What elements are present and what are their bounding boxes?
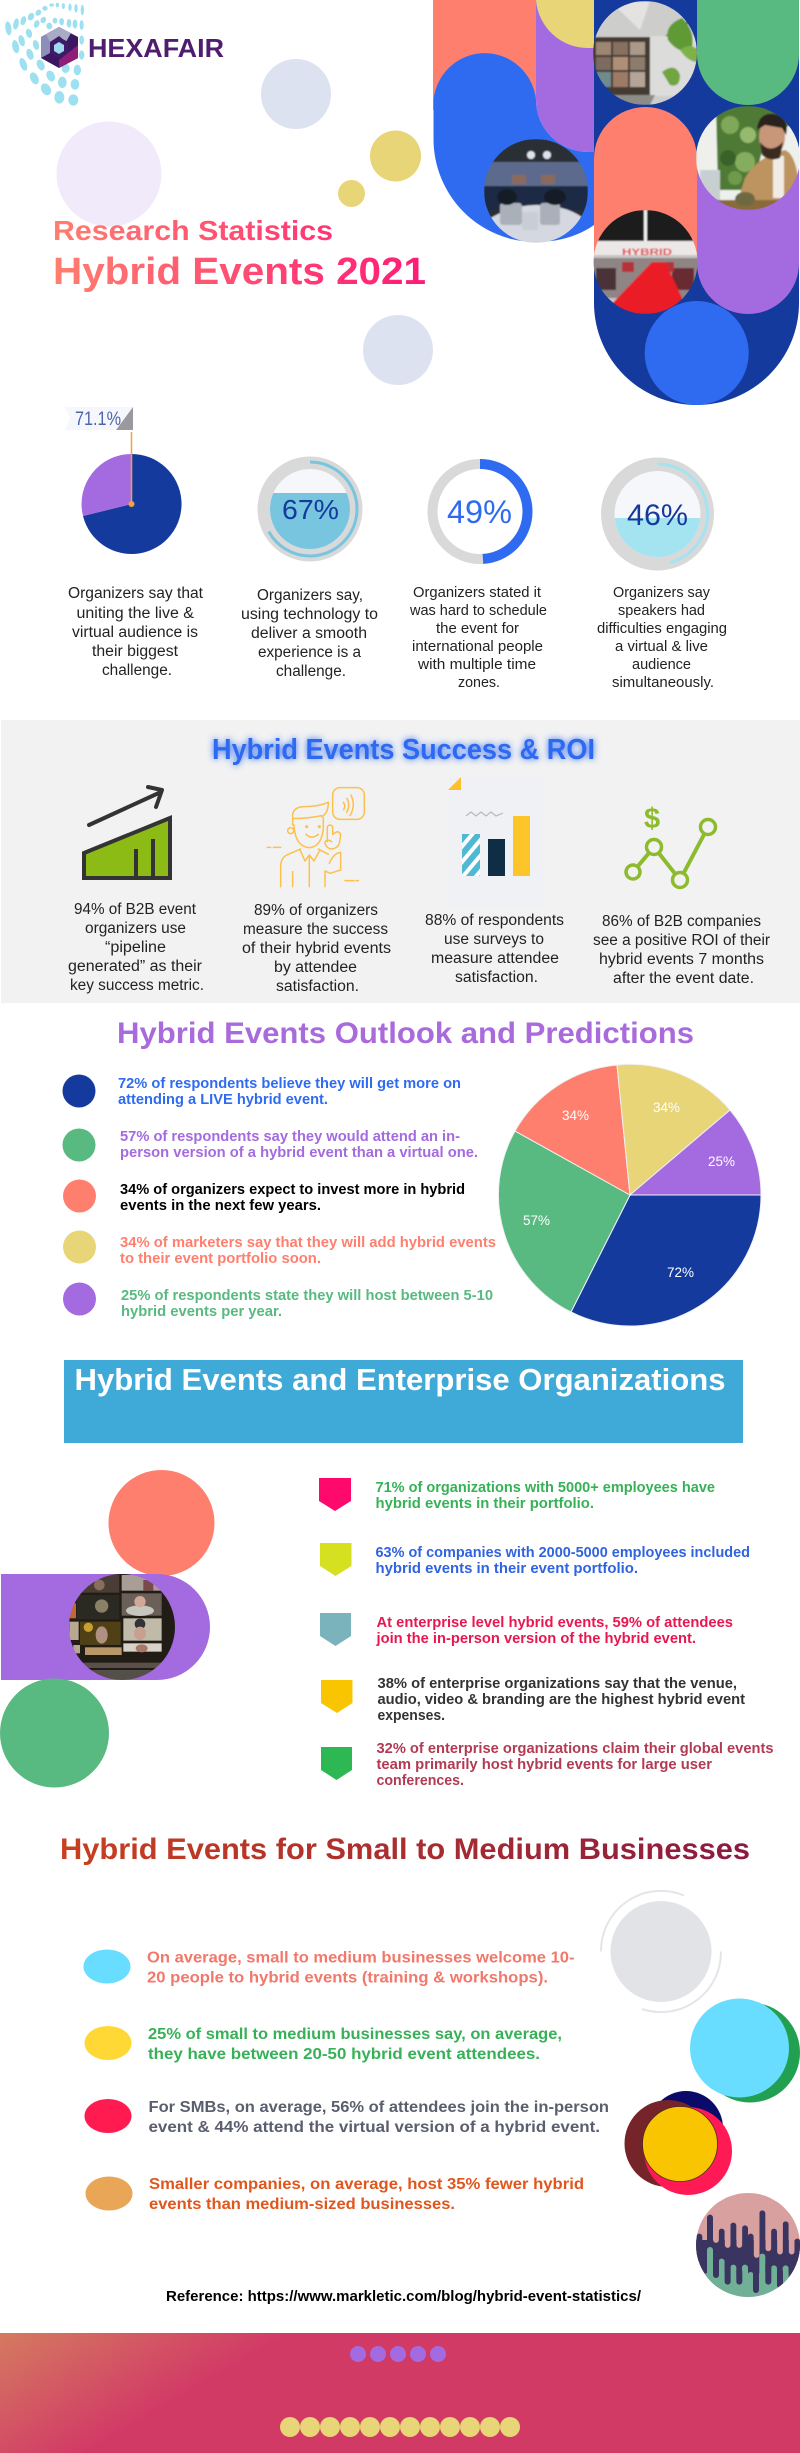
prediction: 72%: attending a LIVE hybrid event. bbox=[118, 1092, 328, 1108]
stat: 59%: At enterprise level hybrid events, 59% of attendees bbox=[376, 1615, 733, 1631]
heading banner: Hybrid Events and Enterprise Organizations bbox=[74, 1362, 726, 1397]
legend bullets bbox=[62, 1074, 96, 1316]
section: outlook and predictions bbox=[62, 1017, 761, 1326]
caption: satisfaction: by attendee bbox=[274, 959, 357, 976]
prediction: 72%: 72% of respondents believe they will get more on bbox=[118, 1076, 461, 1092]
pie chart: outlook: 34% bbox=[562, 1107, 589, 1123]
stat: in-person split: For SMBs, on average, 56% of attendees join the in-person bbox=[148, 2099, 609, 2116]
stat: 63%: hybrid events in their event portfolio. bbox=[376, 1561, 638, 1577]
tag markers bbox=[319, 1478, 352, 1780]
prediction: 34% organizers: 34% of organizers expect to invest more in hybrid bbox=[120, 1182, 465, 1198]
caption: stat 3 bbox=[409, 585, 547, 691]
caption: stat 1: virtual audience is bbox=[72, 624, 198, 641]
section: organizer challenges bbox=[65, 407, 727, 691]
caption: surveys: use surveys to bbox=[444, 931, 544, 948]
heading banner bbox=[64, 1360, 743, 1443]
section: enterprise organizations bbox=[0, 1360, 774, 1789]
photo: man with laptop and coffee bbox=[696, 106, 800, 210]
caption: pipeline: 94% of B2B event bbox=[74, 901, 197, 918]
heading: success and ROI: Hybrid Events Success & ROI bbox=[212, 734, 595, 766]
caption: stat 4: speakers had bbox=[618, 603, 705, 619]
prediction: 57%: person version of a hybrid event than a virtual one. bbox=[120, 1145, 478, 1161]
caption: stat 3: Organizers stated it bbox=[413, 585, 541, 601]
caption: stat 3: the event for bbox=[436, 621, 519, 637]
caption: ROI: after the event date. bbox=[613, 970, 754, 987]
panel: success and ROI bbox=[1, 720, 800, 1003]
stat: 63%: 63% of companies with 2000-5000 employees included bbox=[376, 1545, 750, 1561]
prediction: 34% organizers bbox=[120, 1182, 465, 1214]
photo: panel discussion bbox=[484, 139, 588, 243]
caption: pipeline: “pipeline bbox=[105, 939, 166, 956]
caption: stat 1 bbox=[68, 585, 204, 679]
caption: ROI bbox=[593, 913, 770, 987]
yellow dots bbox=[280, 2417, 520, 2437]
icon: ROI trend line: $ bbox=[644, 803, 660, 835]
stat: 67% gauge: 67% bbox=[282, 494, 339, 525]
stat: 49% donut bbox=[432, 464, 528, 559]
caption: stat 2: deliver a smooth bbox=[251, 625, 367, 642]
caption: stat 2: experience is a bbox=[258, 644, 361, 661]
stat: attendance 20-50 bbox=[148, 2026, 562, 2063]
heading: SMB: Hybrid Events for Small to Medium Businesses bbox=[60, 1833, 750, 1866]
stat: 38%: expenses. bbox=[378, 1708, 445, 1724]
prediction: 57% bbox=[120, 1129, 478, 1161]
pie chart: outlook: 72% bbox=[667, 1264, 694, 1280]
title line 1: Research Statistics bbox=[53, 215, 333, 246]
decoration: grey circle with arcs bbox=[601, 1891, 721, 2012]
bullets bbox=[84, 1950, 132, 2210]
stat: 32%: 32% of enterprise organizations claim their global events bbox=[376, 1741, 774, 1757]
logo: Hexafair bbox=[4, 3, 224, 106]
stat: 46% gauge: 46% bbox=[627, 499, 688, 532]
prediction: 25%: 25% of respondents state they will host between 5-10 bbox=[121, 1288, 493, 1304]
caption: stat 4: audience bbox=[632, 657, 691, 673]
caption: stat 2: challenge. bbox=[276, 663, 346, 680]
photo: hybrid event hall with red carpet: HYBRID bbox=[622, 247, 673, 257]
decoration: overlapping circles bbox=[624, 2091, 732, 2195]
caption: surveys: satisfaction. bbox=[455, 969, 538, 986]
caption: satisfaction bbox=[242, 902, 391, 995]
purple dots bbox=[350, 2346, 446, 2362]
decoration: equalizer circle bbox=[696, 2193, 800, 2297]
caption: stat 3: was hard to schedule bbox=[409, 603, 547, 619]
stat: in-person split: event & 44% attend the virtual version of a hybrid event. bbox=[148, 2119, 600, 2136]
stat: fewer events: Smaller companies, on average, host 35% fewer hybrid bbox=[149, 2176, 584, 2193]
icon: growth chart bbox=[84, 787, 170, 878]
stat: 32%: team primarily host hybrid events for large user bbox=[376, 1757, 712, 1773]
prediction: 57%: 57% of respondents say they would attend an in- bbox=[120, 1129, 460, 1145]
stat: 71.1% pie bbox=[65, 407, 182, 554]
caption: stat 2: using technology to bbox=[241, 606, 378, 623]
stat: fewer events: events than medium-sized businesses. bbox=[149, 2196, 455, 2213]
pie chart: outlook bbox=[498, 1064, 761, 1326]
caption: satisfaction: 89% of organizers bbox=[254, 902, 378, 919]
caption: stat 1: Organizers say that bbox=[68, 585, 204, 602]
caption: stat 2 bbox=[241, 587, 378, 680]
photo: laptop video call and plant bbox=[593, 1, 698, 105]
stat: 71% bbox=[376, 1480, 715, 1512]
prediction: 34% organizers: events in the next few years. bbox=[120, 1198, 321, 1214]
caption: stat 2: Organizers say, bbox=[257, 587, 363, 604]
caption: ROI: see a positive ROI of their bbox=[593, 932, 770, 949]
stat: 71%: 71% of organizations with 5000+ employees have bbox=[376, 1480, 715, 1496]
header title bbox=[53, 215, 426, 293]
caption: stat 3: with multiple time bbox=[417, 657, 536, 673]
stat: 32% bbox=[376, 1741, 774, 1789]
logo wordmark: HEXAFAIR bbox=[88, 33, 224, 63]
caption: stat 3: zones. bbox=[458, 675, 500, 691]
caption: stat 4: difficulties engaging bbox=[597, 621, 727, 637]
stat: attendance 20-50: 25% of small to medium businesses say, on average, bbox=[148, 2026, 562, 2043]
caption: stat 4: a virtual & live bbox=[615, 639, 708, 655]
prediction: 72% bbox=[118, 1076, 461, 1108]
header collage: colored capsules and photos bbox=[433, 0, 800, 405]
caption: satisfaction: of their hybrid events bbox=[242, 940, 391, 957]
caption: pipeline: organizers use bbox=[85, 920, 186, 937]
pie chart: outlook: 25% bbox=[708, 1153, 735, 1169]
caption: surveys: 88% of respondents bbox=[425, 912, 564, 929]
caption: satisfaction: measure the success bbox=[243, 921, 388, 938]
logo dot pattern bbox=[4, 3, 84, 106]
stat: 63% bbox=[376, 1545, 750, 1577]
prediction: 25% bbox=[121, 1288, 493, 1320]
stat: attendance 10-20: On average, small to medium businesses welcome 10- bbox=[147, 1950, 574, 1966]
caption: pipeline: key success metric. bbox=[70, 977, 204, 994]
caption: stat 4 bbox=[597, 585, 727, 691]
heading: outlook: Hybrid Events Outlook and Predictions bbox=[117, 1017, 694, 1050]
stat: 38% bbox=[378, 1676, 745, 1724]
stat: 59%: join the in-person version of the hybrid event. bbox=[375, 1631, 696, 1647]
decorative circles bbox=[56, 59, 433, 385]
stat: 71%: hybrid events in their portfolio. bbox=[376, 1496, 594, 1512]
footer band bbox=[0, 2333, 800, 2453]
caption: surveys: measure attendee bbox=[431, 950, 559, 967]
caption: stat 1: challenge. bbox=[102, 662, 172, 679]
stat: 49% donut: 49% bbox=[447, 494, 512, 530]
stat: 38%: audio, video & branding are the highest hybrid event bbox=[378, 1692, 745, 1708]
stat: 67% gauge bbox=[258, 456, 362, 562]
caption: ROI: hybrid events 7 months bbox=[599, 951, 764, 968]
stat: fewer events bbox=[149, 2176, 584, 2213]
section: small to medium businesses bbox=[60, 1833, 800, 2300]
icon: person with speech bubble bbox=[267, 788, 364, 887]
caption: stat 1: uniting the live & bbox=[76, 605, 195, 622]
caption: stat 3: international people bbox=[412, 639, 543, 655]
stat: 59% bbox=[375, 1615, 733, 1647]
prediction: 25%: hybrid events per year. bbox=[121, 1304, 282, 1320]
decoration: cyan and green circles bbox=[690, 1998, 800, 2102]
caption: stat 4: simultaneously. bbox=[612, 675, 714, 691]
stat: attendance 10-20: 20 people to hybrid events (training & workshops). bbox=[147, 1970, 548, 1986]
stat: attendance 10-20 bbox=[147, 1950, 574, 1986]
caption: satisfaction: satisfaction. bbox=[276, 978, 359, 995]
photo: hybrid event hall with red carpet bbox=[593, 210, 698, 314]
caption: ROI: 86% of B2B companies bbox=[602, 913, 761, 930]
pie chart: outlook: 34% bbox=[653, 1099, 680, 1115]
title line 2: Hybrid Events 2021 bbox=[53, 251, 426, 293]
icon: survey bar chart bbox=[448, 777, 543, 907]
pie chart: outlook: 57% bbox=[523, 1212, 550, 1228]
stat: in-person split bbox=[148, 2099, 609, 2136]
stat: 32%: conferences. bbox=[376, 1773, 464, 1789]
stat: 38%: 38% of enterprise organizations say that the venue, bbox=[378, 1676, 737, 1692]
caption: pipeline: generated” as their bbox=[68, 958, 202, 975]
stat: 71.1% pie: 71.1% bbox=[75, 409, 121, 430]
stat: 46% gauge bbox=[601, 458, 714, 570]
prediction: 34% marketers bbox=[120, 1235, 496, 1267]
icon: ROI trend line bbox=[626, 803, 716, 888]
caption: stat 1: their biggest bbox=[92, 643, 179, 660]
caption: stat 4: Organizers say bbox=[613, 585, 711, 601]
stat: attendance 20-50: they have between 20-50 hybrid event attendees. bbox=[148, 2046, 540, 2063]
caption: pipeline bbox=[68, 901, 204, 994]
caption: surveys bbox=[425, 912, 564, 986]
prediction: 34% marketers: to their event portfolio soon. bbox=[120, 1251, 321, 1267]
reference line: Reference: https://www.markletic.com/blog/hybrid-event-statistics/ bbox=[166, 2288, 642, 2305]
logo hexagon mark bbox=[41, 27, 78, 68]
prediction: 34% marketers: 34% of marketers say that they will add hybrid events bbox=[120, 1235, 496, 1251]
collage: shapes and video-call photo bbox=[0, 1470, 214, 1788]
